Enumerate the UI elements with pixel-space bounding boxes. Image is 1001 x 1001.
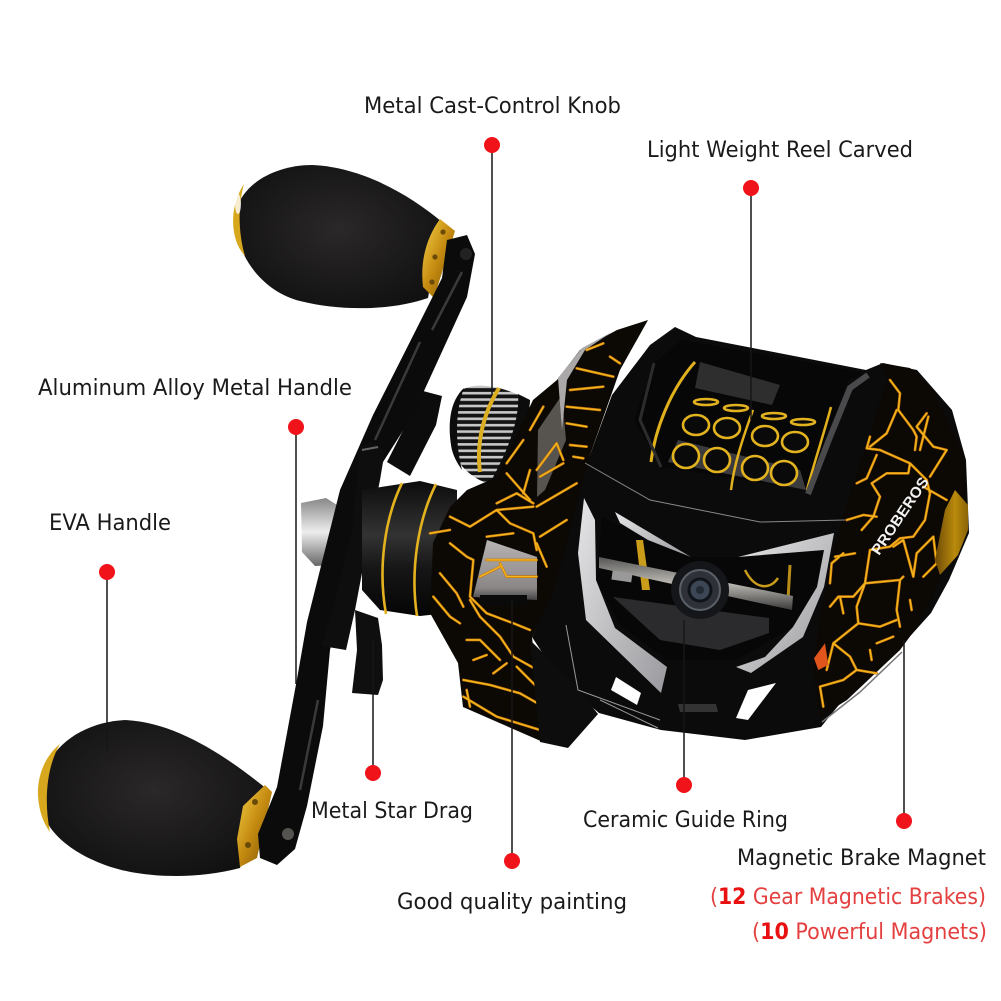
brand name: PROBEROS: [868, 474, 933, 558]
label: brake magnet: Magnetic Brake Magnet: [737, 846, 986, 871]
label: star drag: Metal Star Drag: [311, 799, 473, 824]
frame bottom cutouts: [566, 625, 776, 728]
star drag lever: [352, 610, 383, 695]
silver frame trim: [578, 498, 667, 693]
reel product photo: [38, 165, 969, 876]
ceramic guide ring: [671, 561, 729, 619]
callout line: brake magnet: [896, 640, 912, 829]
spool window: [585, 340, 868, 522]
label: metal handle: Aluminum Alloy Metal Handle: [38, 376, 352, 401]
spool gold holes: [673, 399, 815, 485]
lower EVA handle knob: [38, 720, 272, 876]
label: reel carved: Light Weight Reel Carved: [647, 138, 913, 163]
cast-control knob: [450, 386, 530, 483]
label: cast-control knob: Metal Cast-Control Knob: [364, 94, 621, 119]
drive nut: [301, 498, 345, 566]
drive cylinder with gold stripes: [362, 481, 457, 616]
crackle panel with brand: [813, 363, 968, 722]
callout line: painting: [504, 600, 520, 869]
label: painting: Good quality painting: [397, 890, 627, 915]
label: EVA handle: EVA Handle: [49, 511, 171, 536]
callout line: EVA handle: [99, 564, 115, 752]
callout line: metal handle: [288, 419, 304, 684]
guide bar: [599, 557, 793, 610]
foot of reel: [530, 640, 598, 748]
upper EVA handle knob: [233, 165, 455, 308]
side plate with crackle paint: [430, 320, 648, 742]
label: guide ring: Ceramic Guide Ring: [583, 808, 788, 833]
aluminum handle arm: [258, 235, 475, 865]
label: powerful magnets: (10 Powerful Magnets): [752, 920, 987, 945]
callout line: reel carved: [743, 180, 759, 420]
callout line: guide ring: [676, 620, 692, 793]
callout line: cast-control knob: [484, 137, 500, 395]
wing behind handle: [387, 391, 442, 476]
main frame body: [532, 327, 969, 740]
label: magnetic brakes: (12 Gear Magnetic Brakes): [710, 885, 986, 910]
line guide opening: [578, 498, 834, 693]
callout line: star drag: [365, 640, 381, 781]
